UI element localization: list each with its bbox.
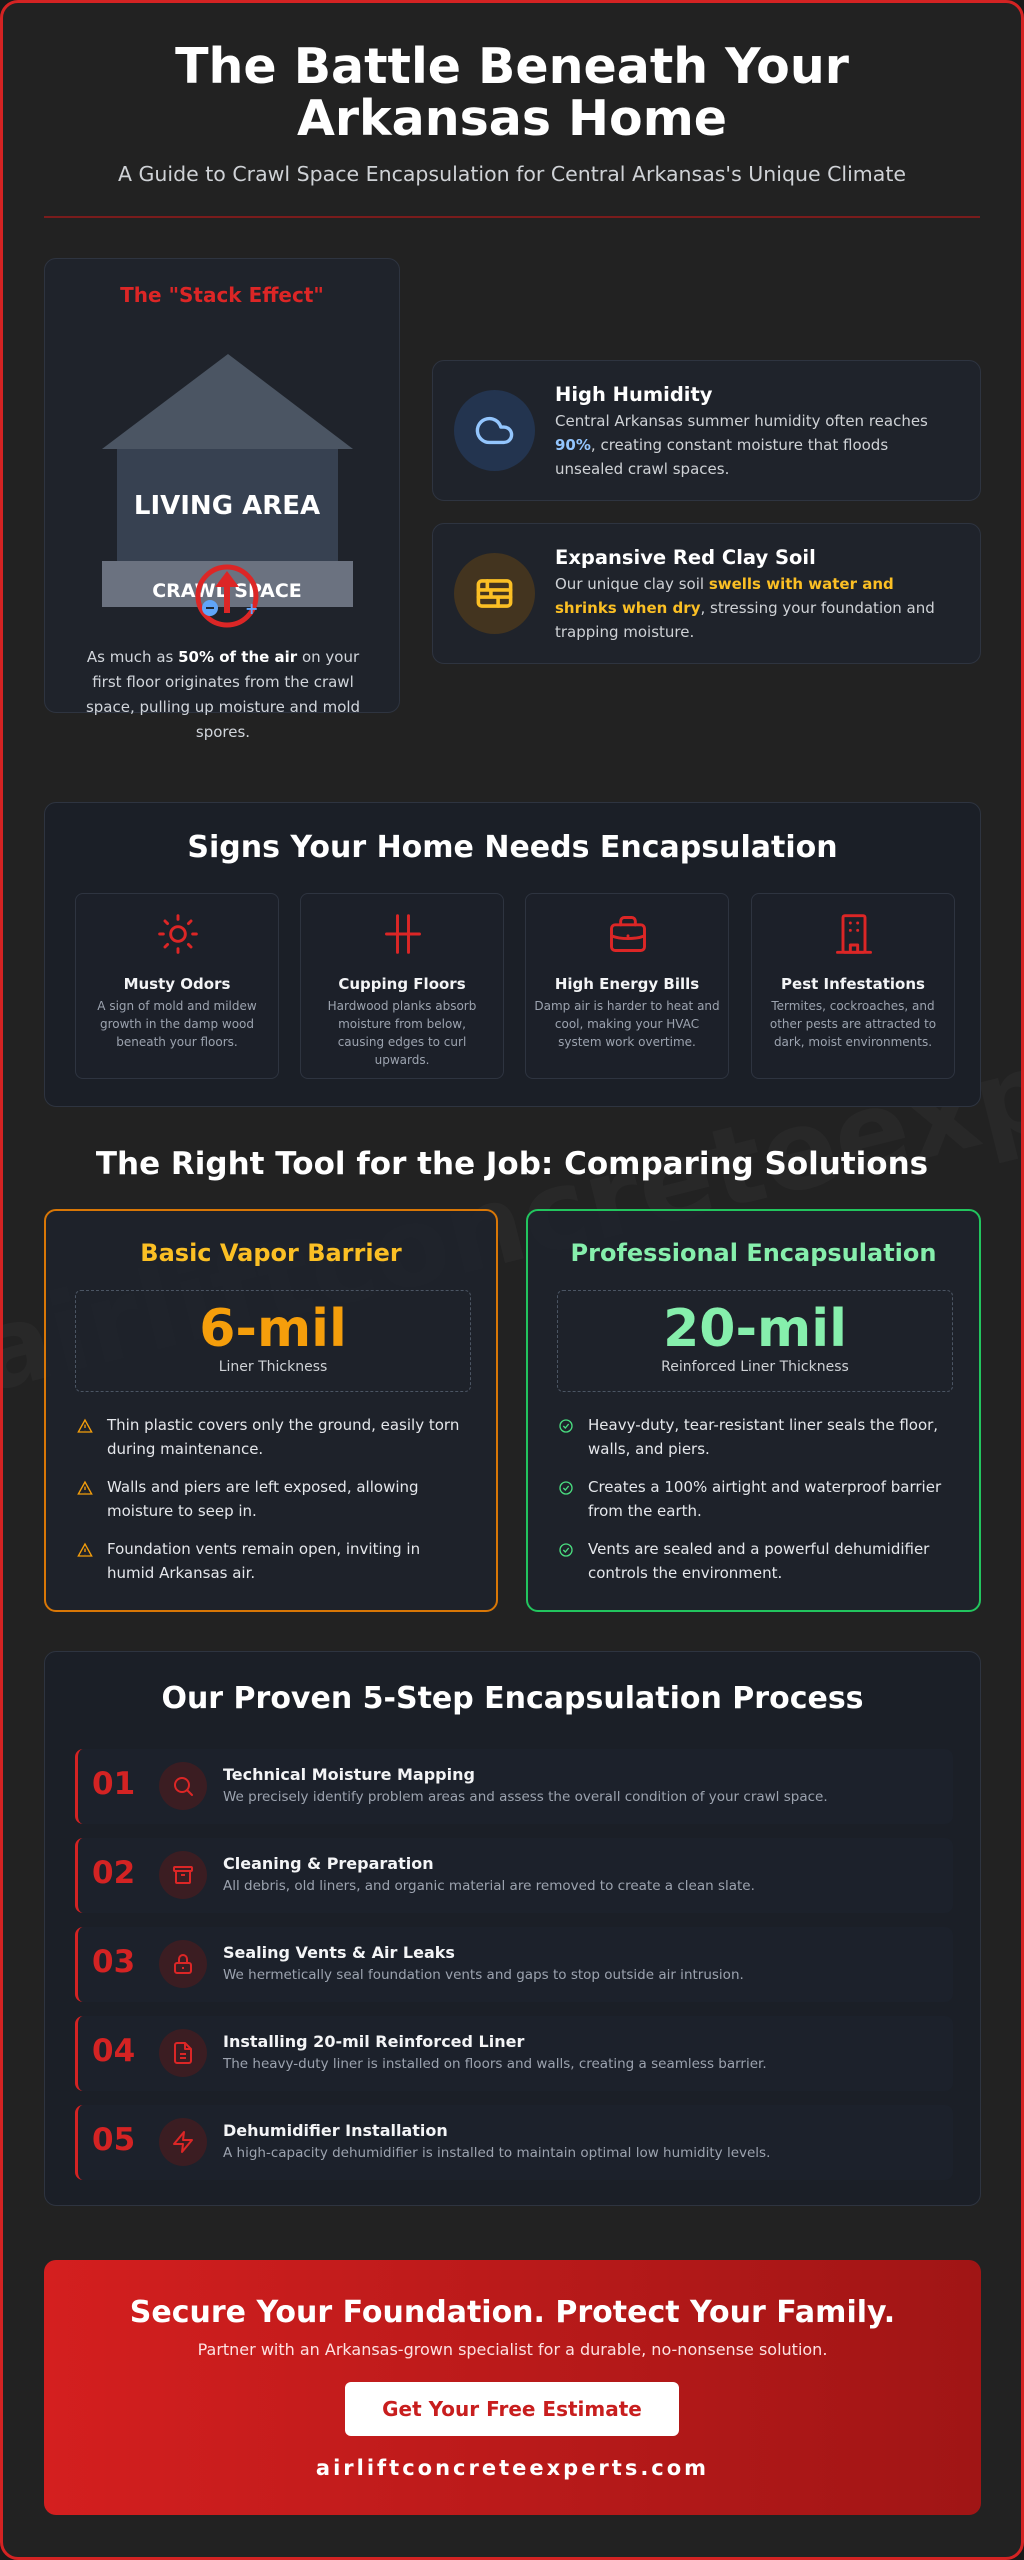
step 3: Sealing Vents & Air Leaks [223, 1943, 455, 1962]
url: airliftconcreteexperts.com [316, 2456, 709, 2480]
step 2: Cleaning & Preparation [223, 1854, 434, 1873]
panel: professional encapsulation: Vents are sealed and a powerful dehumidifier controls the environment. [588, 1540, 929, 1582]
sign: musty odors: Musty Odors [124, 975, 230, 993]
panel: professional encapsulation [526, 1209, 981, 1612]
cta banner: Secure Your Foundation. Protect Your Family. [130, 2295, 895, 2330]
icon: soil layers [454, 553, 535, 634]
sign: musty odors [75, 893, 279, 1079]
sign: energy bills [525, 893, 729, 1079]
step 3: 03 [92, 1944, 135, 1980]
button: Get Your Free Estimate [382, 2397, 642, 2421]
cta banner [44, 2260, 981, 2515]
sign: energy bills: Damp air is harder to heat and cool, making your HVAC system work overtime. [534, 999, 720, 1049]
panel: basic vapor barrier [44, 1209, 498, 1612]
card: red clay soil: Expansive Red Clay Soil [555, 546, 816, 569]
title [175, 38, 849, 147]
icon: cloud [454, 390, 535, 471]
sign: pests: Pest Infestations [781, 975, 925, 993]
step 2: All debris, old liners, and organic material are removed to create a clean slate. [223, 1878, 755, 1894]
step 5: A high-capacity dehumidifier is installed to maintain optimal low humidity levels. [223, 2145, 770, 2161]
title: Arkansas Home [297, 90, 727, 147]
card: red clay soil [432, 523, 981, 664]
heading: comparing solutions: The Right Tool for the Job: Comparing Solutions [96, 1146, 928, 1182]
sign: pests: Termites, cockroaches, and other pests are attracted to dark, moist environments. [770, 999, 936, 1049]
stat: 20-mil: Reinforced Liner Thickness [661, 1359, 849, 1375]
step 4: The heavy-duty liner is installed on floors and walls, creating a seamless barrier. [223, 2056, 767, 2072]
panel: professional encapsulation: Heavy-duty, tear-resistant liner seals the floor, walls, and piers. [588, 1416, 938, 1458]
step 2 [75, 1838, 953, 1913]
list: drawbacks [77, 1416, 459, 1582]
text: stack stat: As much as 50% of the air on your first floor originates from the crawl space, pulling up moisture and mold spores. [86, 648, 360, 741]
panel: process [44, 1651, 981, 2206]
sign: cupping floors [300, 893, 504, 1079]
card: high humidity [432, 360, 981, 501]
step 1 [75, 1749, 953, 1824]
step 5: 05 [92, 2122, 135, 2158]
step 2: 02 [92, 1855, 135, 1891]
panel: professional encapsulation: Creates a 100% airtight and waterproof barrier from the earth. [588, 1478, 941, 1520]
cta banner: Partner with an Arkansas-grown specialist for a durable, no-nonsense solution. [198, 2340, 827, 2359]
step 5: Dehumidifier Installation [223, 2121, 448, 2140]
card: high humidity: Central Arkansas summer humidity often reaches 90%, creating constant moisture that floods unsealed crawl spaces. [555, 412, 928, 478]
panel: basic vapor barrier: Foundation vents remain open, inviting in humid Arkansas air. [107, 1540, 420, 1582]
sign: musty odors: A sign of mold and mildew growth in the damp wood beneath your floors. [97, 999, 257, 1049]
stat: 6-mil: 6-mil [199, 1299, 347, 1359]
sign: pests [751, 893, 955, 1079]
button [345, 2382, 679, 2436]
icon: house diagram [102, 354, 353, 628]
panel: basic vapor barrier: Walls and piers are left exposed, allowing moisture to seep in. [107, 1478, 419, 1520]
stat: 20-mil [557, 1290, 953, 1392]
step 1: We precisely identify problem areas and assess the overall condition of your crawl space. [223, 1789, 828, 1805]
step 1: Technical Moisture Mapping [223, 1765, 475, 1784]
icon: house diagram: + [245, 599, 258, 618]
heading: signs: Signs Your Home Needs Encapsulation [187, 830, 838, 865]
panel: basic vapor barrier: Thin plastic covers only the ground, easily torn during maintenance. [107, 1416, 459, 1458]
card: high humidity: High Humidity [555, 383, 713, 406]
card: red clay soil: Our unique clay soil swells with water and shrinks when dry, stressing your foundation and trapping moisture. [555, 575, 935, 641]
icon: house diagram: CRAWL SPACE [152, 580, 302, 602]
panel: signs [44, 802, 981, 1107]
step 4: 04 [92, 2033, 135, 2069]
panel: basic vapor barrier: Basic Vapor Barrier [140, 1239, 402, 1267]
sign: energy bills: High Energy Bills [555, 975, 699, 993]
step 4 [75, 2016, 953, 2091]
stat: 6-mil [75, 1290, 471, 1392]
step 3: We hermetically seal foundation vents and gaps to stop outside air intrusion. [223, 1967, 744, 1983]
panel: professional encapsulation: Professional Encapsulation [571, 1239, 936, 1267]
list: benefits [559, 1416, 942, 1582]
heading: process: Our Proven 5-Step Encapsulation Process [161, 1681, 864, 1716]
stat: 6-mil: Liner Thickness [219, 1359, 327, 1375]
sign: cupping floors: Hardwood planks absorb moisture from below, causing edges to curl upwards. [328, 999, 476, 1067]
step 1: 01 [92, 1766, 135, 1802]
step 3 [75, 1927, 953, 2002]
panel: stack effect [44, 258, 400, 713]
icon: house diagram: LIVING AREA [134, 491, 320, 521]
subtitle: A Guide to Crawl Space Encapsulation for Central Arkansas's Unique Climate [118, 162, 906, 186]
step 5 [75, 2105, 953, 2180]
step 4: Installing 20-mil Reinforced Liner [223, 2032, 524, 2051]
stat: 20-mil: 20-mil [663, 1299, 847, 1359]
title: The Battle Beneath Your [175, 38, 849, 95]
sign: cupping floors: Cupping Floors [338, 975, 466, 993]
heading: stack effect: The "Stack Effect" [120, 283, 324, 307]
